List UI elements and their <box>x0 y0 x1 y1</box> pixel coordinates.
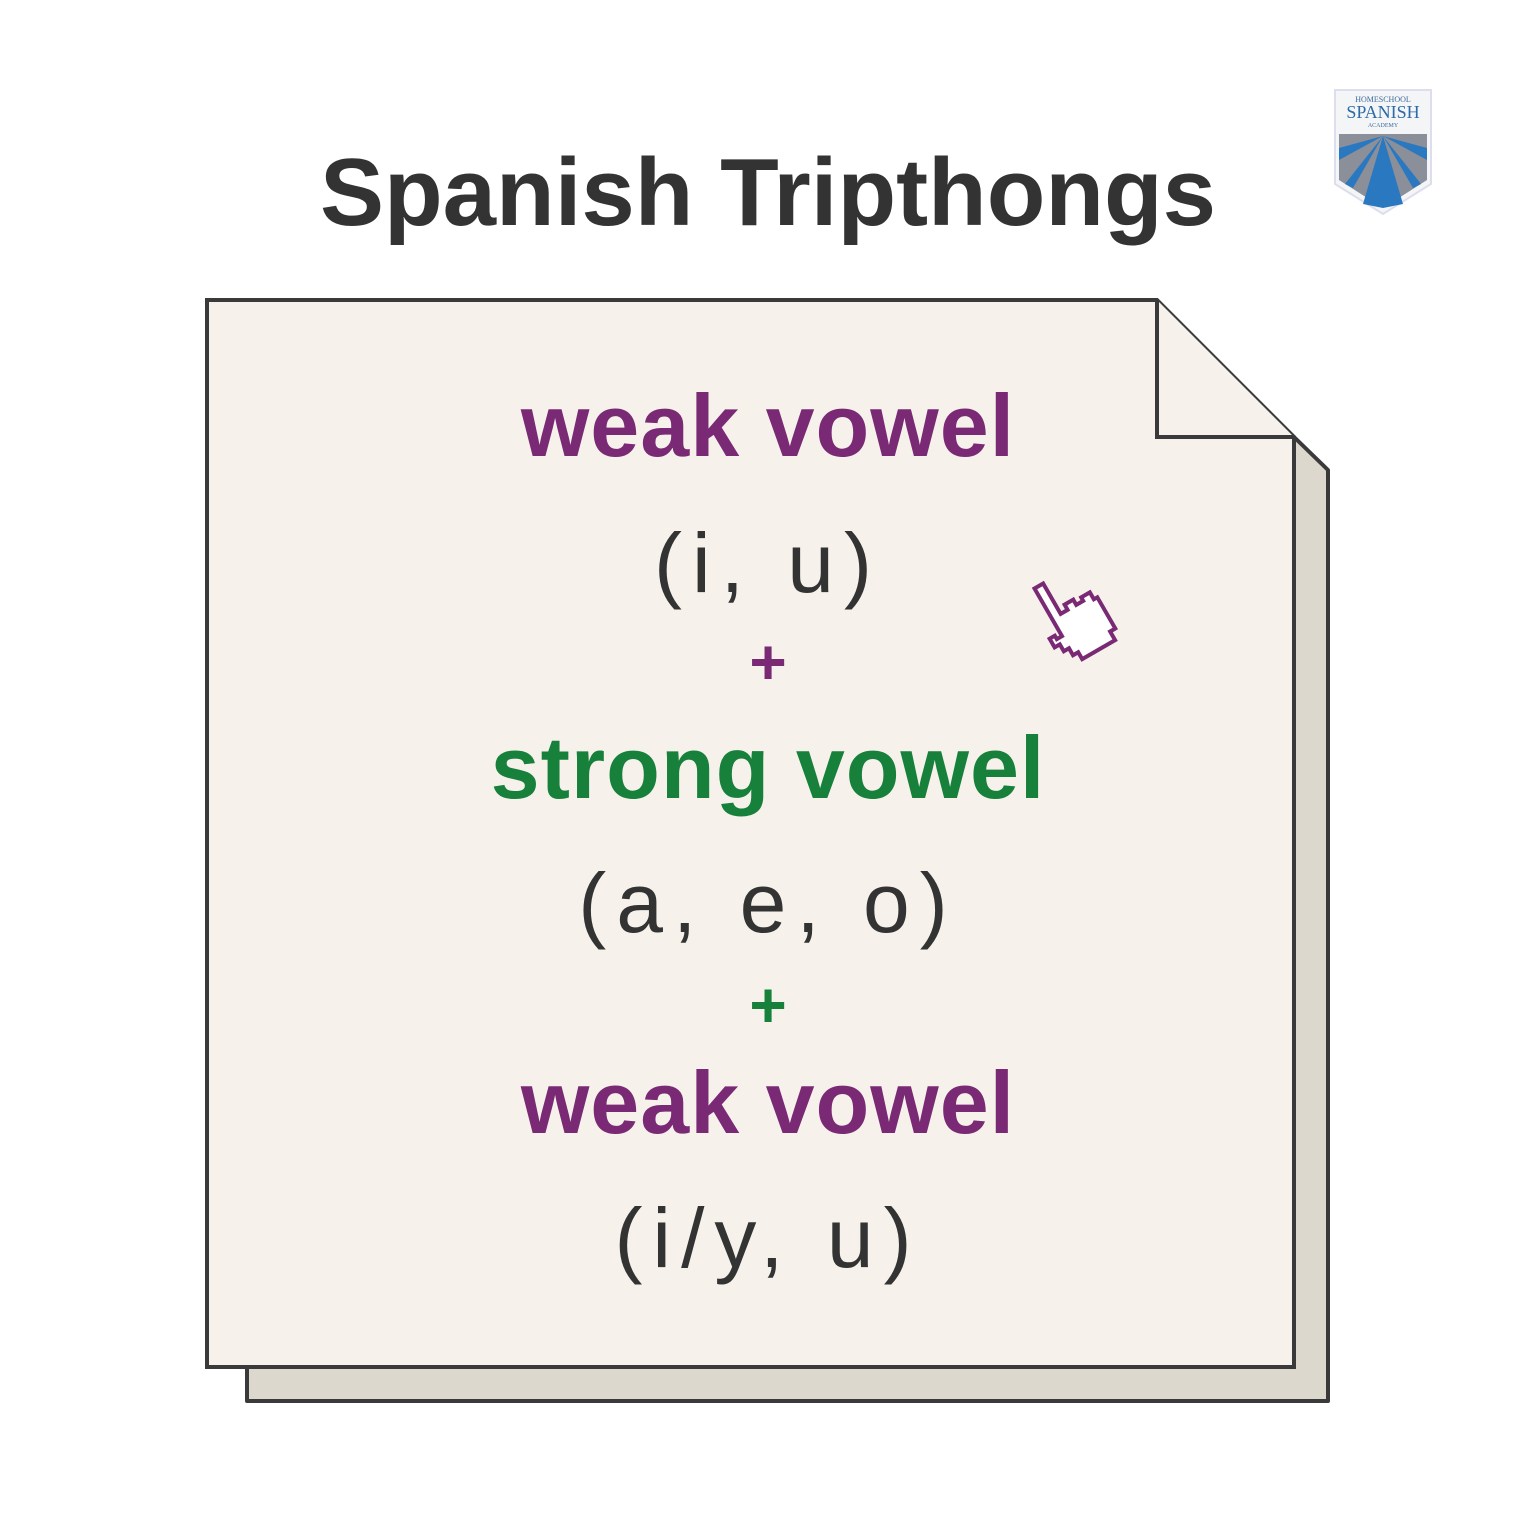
plus 1: + <box>749 626 787 698</box>
heading: weak vowel 1: weak vowel <box>521 376 1015 475</box>
text: (a, e, o): (a, e, o) <box>578 856 958 950</box>
heading: strong vowel: strong vowel <box>491 718 1045 817</box>
plus 2: + <box>749 969 787 1041</box>
logo: Homeschool Spanish Academy: SPANISH <box>1346 102 1420 122</box>
title: Spanish Tripthongs <box>320 139 1216 246</box>
text: (i/y, u): (i/y, u) <box>614 1191 922 1285</box>
logo: Homeschool Spanish Academy: ACADEMY <box>1368 123 1399 129</box>
logo: Homeschool Spanish Academy: HOMESCHOOL <box>1355 95 1411 104</box>
heading: weak vowel 2: weak vowel <box>521 1053 1015 1152</box>
logo: Homeschool Spanish Academy <box>1334 89 1432 215</box>
icon: pointer hand cursor <box>1032 580 1118 662</box>
text: (i, u): (i, u) <box>654 516 882 610</box>
